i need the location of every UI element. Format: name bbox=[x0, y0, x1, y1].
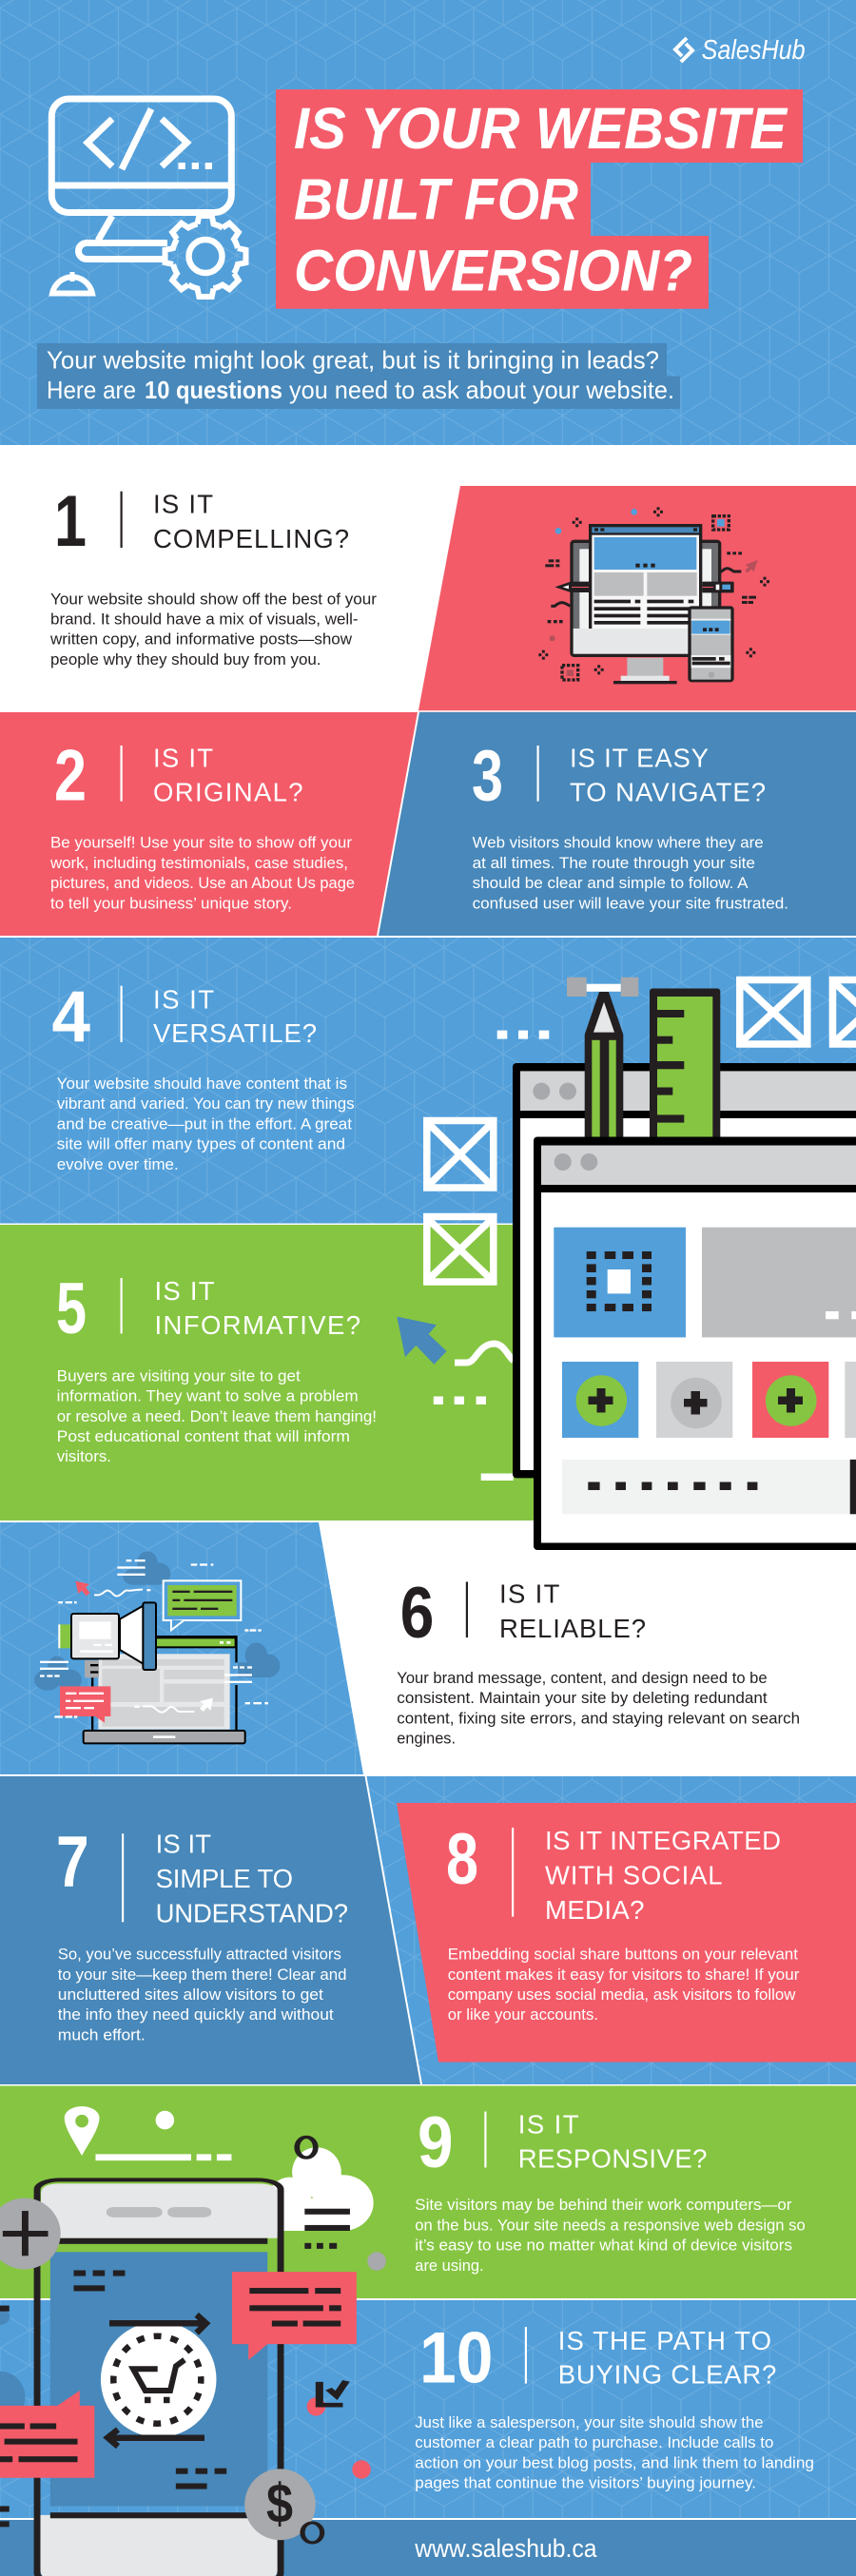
body text bbox=[49, 834, 355, 912]
body text: consistent. Maintain your site by deleting redundant bbox=[397, 1689, 768, 1707]
body text: customer a clear path to purchase. Include calls to bbox=[415, 2433, 773, 2451]
icon: monitor with code and gear bbox=[51, 99, 246, 297]
title block bbox=[276, 89, 803, 309]
chat bubble left bbox=[0, 2391, 94, 2478]
illustration: megaphone and laptop bbox=[34, 1551, 280, 1743]
section divider line bbox=[418, 710, 856, 712]
number 8: 8 bbox=[446, 1819, 478, 1900]
heading: IS IT bbox=[518, 2109, 579, 2139]
body text: confused user will leave your site frustrated. bbox=[473, 894, 788, 912]
icon: location pin bbox=[65, 2106, 231, 2160]
title block: IS YOUR WEBSITE bbox=[294, 96, 788, 161]
phone body bbox=[37, 2179, 281, 2576]
body text: Your brand message, content, and design need to be bbox=[397, 1669, 768, 1687]
heading: IS IT bbox=[156, 1830, 211, 1859]
icon: pencil bbox=[567, 978, 638, 1137]
heading: BUYING CLEAR? bbox=[558, 2360, 776, 2390]
body text bbox=[57, 1367, 377, 1465]
heading: INFORMATIVE? bbox=[154, 1310, 360, 1340]
heading: COMPELLING? bbox=[153, 524, 349, 553]
intro text: you need to ask about your website. bbox=[289, 376, 674, 404]
body text: Your website should have content that is bbox=[57, 1075, 347, 1093]
dots and squiggle bbox=[434, 1031, 549, 1481]
body text: the info they need quickly and without bbox=[58, 2005, 334, 2024]
body text: information. They want to solve a problem bbox=[57, 1387, 359, 1405]
body text bbox=[415, 2413, 814, 2492]
heading bbox=[558, 2326, 776, 2390]
panel: section 5 informative bbox=[0, 1225, 856, 1520]
heading bbox=[153, 744, 303, 807]
number 6: 6 bbox=[400, 1573, 434, 1654]
heading: IS IT INTEGRATED bbox=[545, 1826, 781, 1855]
dollar button bbox=[244, 2469, 316, 2540]
panel: section 6 reliable bbox=[0, 1522, 856, 1774]
body text: should be clear and simple to follow. A bbox=[473, 874, 749, 892]
icon: check mark bbox=[320, 2382, 343, 2405]
body text bbox=[448, 1946, 800, 2024]
number 2: 2 bbox=[54, 736, 87, 817]
body text bbox=[49, 591, 377, 668]
heading: IS IT bbox=[499, 1579, 560, 1609]
panel: section 8 integrated with social media bbox=[367, 1776, 856, 2084]
number 1: 1 bbox=[54, 481, 87, 562]
body text: pictures, and videos. Use an About Us page bbox=[50, 874, 355, 892]
footer: www.saleshub.ca bbox=[414, 2534, 597, 2563]
cart circle bbox=[101, 2322, 217, 2437]
heading: IS IT EASY bbox=[570, 744, 709, 773]
body text bbox=[58, 1946, 347, 2044]
body text: and be creative—put in the effort. A great bbox=[57, 1114, 352, 1133]
footer bbox=[0, 2520, 856, 2576]
heading: RESPONSIVE? bbox=[518, 2143, 707, 2174]
body text: action on your best blog posts, and link them to landing bbox=[415, 2453, 814, 2471]
heading bbox=[499, 1579, 646, 1643]
heading: TO NAVIGATE? bbox=[570, 778, 766, 807]
heading: IS IT bbox=[153, 744, 213, 773]
body text bbox=[397, 1669, 800, 1747]
left edge blobs bbox=[0, 2309, 25, 2423]
body text: work, including testimonials, case studies, bbox=[49, 854, 348, 872]
heading: VERSATILE? bbox=[153, 1018, 317, 1048]
icon: placeholder image boxes bbox=[427, 979, 856, 1282]
body text bbox=[57, 1075, 355, 1173]
body text: written copy, and informative posts—show bbox=[49, 630, 353, 649]
body text: Post educational content that will inform bbox=[57, 1427, 350, 1445]
number 3: 3 bbox=[472, 736, 503, 817]
body text: much effort. bbox=[58, 2026, 146, 2044]
icon: cursor arrow bbox=[397, 1317, 447, 1365]
body text bbox=[415, 2196, 806, 2275]
heading bbox=[156, 1830, 348, 1927]
body text: content, fixing site errors, and staying relevant on search bbox=[397, 1709, 800, 1727]
body text: to your site—keep them there! Clear and bbox=[58, 1966, 347, 1984]
panel: section 1 compelling bbox=[0, 447, 856, 712]
heading bbox=[153, 984, 317, 1048]
heading: IS IT bbox=[153, 489, 213, 518]
body text: it’s easy to use no matter what kind of device visitors bbox=[415, 2237, 792, 2255]
body text: pages that continue the visitors’ buying journey. bbox=[415, 2474, 756, 2492]
header background bbox=[0, 0, 856, 445]
illustration: responsive devices bbox=[538, 507, 769, 684]
number 10: 10 bbox=[419, 2318, 493, 2399]
add buttons bbox=[562, 1362, 856, 1438]
heading: ORIGINAL? bbox=[153, 778, 303, 807]
intro text: Your website might look great, but is it bringing in leads? bbox=[47, 346, 659, 375]
panel: section 4 versatile bbox=[0, 938, 856, 1223]
chat bubble right bbox=[232, 2272, 357, 2360]
body text: to tell your business’ unique story. bbox=[50, 894, 292, 912]
title block: CONVERSION? bbox=[294, 239, 692, 303]
heading: MEDIA? bbox=[545, 1895, 644, 1925]
blue image tile bbox=[554, 1228, 686, 1337]
intro text: 10 questions bbox=[145, 376, 282, 404]
illustration: browser windows bbox=[397, 978, 856, 1550]
body text: people why they should buy from you. bbox=[50, 650, 321, 668]
body text: or resolve a need. Don’t leave them hanging! bbox=[57, 1407, 377, 1425]
body text: Just like a salesperson, your site should show the bbox=[415, 2413, 763, 2431]
body text: Web visitors should know where they are bbox=[473, 834, 764, 852]
body text: uncluttered sites allow visitors to get bbox=[58, 1985, 323, 2004]
number 5: 5 bbox=[56, 1269, 87, 1349]
heading: UNDERSTAND? bbox=[156, 1898, 348, 1927]
icon: dollar sign: $ bbox=[266, 2472, 293, 2535]
heading bbox=[153, 489, 349, 553]
body text: Your website should show off the best of your bbox=[50, 591, 377, 609]
body text: are using. bbox=[415, 2256, 484, 2275]
panel: section 2 original bbox=[0, 712, 418, 936]
arrows bbox=[107, 2315, 206, 2447]
plus button bbox=[0, 2198, 61, 2269]
heading: IS IT bbox=[154, 1276, 215, 1306]
icon: cloud bbox=[267, 2147, 374, 2231]
body text: Buyers are visiting your site to get bbox=[57, 1367, 301, 1385]
logo: SalesHub: SalesHub bbox=[702, 35, 806, 66]
back window bbox=[513, 1063, 856, 1478]
body text: at all times. The route through your site bbox=[473, 854, 755, 872]
body text: Embedding social share buttons on your relevant bbox=[448, 1946, 798, 1964]
search bar bbox=[562, 1460, 856, 1514]
panel: section 7 simple to understand bbox=[0, 1776, 420, 2084]
body text: site will offer many types of content and bbox=[57, 1135, 345, 1153]
heading bbox=[570, 744, 766, 807]
heading: IS THE PATH TO bbox=[558, 2326, 771, 2355]
heading: SIMPLE TO bbox=[156, 1864, 293, 1893]
body text: company uses social media, ask visitors to follow bbox=[448, 1985, 796, 2004]
number 4: 4 bbox=[51, 977, 90, 1057]
body text: brand. It should have a mix of visuals, well- bbox=[50, 610, 359, 629]
intro text: Here are bbox=[47, 376, 136, 404]
body text: content makes it easy for visitors to share! If your bbox=[448, 1966, 800, 1984]
intro text bbox=[37, 343, 680, 409]
body text: on the bus. Your site needs a responsive web design so bbox=[415, 2216, 806, 2234]
heading: IS IT bbox=[153, 984, 214, 1014]
body text: Site visitors may be behind their work computers—or bbox=[415, 2196, 792, 2214]
panel: section 3 easy to navigate bbox=[379, 712, 856, 936]
body text bbox=[473, 834, 788, 912]
front window bbox=[534, 1137, 856, 1550]
heading: RELIABLE? bbox=[499, 1614, 646, 1643]
heading: WITH SOCIAL bbox=[545, 1860, 723, 1890]
grey image tile bbox=[702, 1228, 856, 1337]
number 7: 7 bbox=[56, 1822, 89, 1903]
panel: section 10 path to buying bbox=[0, 2300, 856, 2518]
title block: BUILT FOR bbox=[294, 167, 578, 232]
body text: evolve over time. bbox=[57, 1155, 179, 1173]
body text: Be yourself! Use your site to show off your bbox=[50, 834, 352, 852]
body text: vibrant and varied. You can try new things bbox=[57, 1094, 355, 1113]
body text: visitors. bbox=[57, 1447, 111, 1465]
icon: ruler bbox=[650, 989, 720, 1141]
number 9: 9 bbox=[418, 2102, 453, 2183]
body text: or like your accounts. bbox=[448, 2005, 598, 2024]
body text: So, you’ve successfully attracted visitors bbox=[58, 1946, 341, 1964]
body text: engines. bbox=[397, 1729, 456, 1747]
panel: section 9 responsive bbox=[0, 2086, 856, 2298]
heading bbox=[518, 2109, 707, 2174]
heading bbox=[154, 1276, 360, 1340]
illustration: phone with shopping cart bbox=[0, 2106, 386, 2576]
heading bbox=[545, 1826, 781, 1925]
